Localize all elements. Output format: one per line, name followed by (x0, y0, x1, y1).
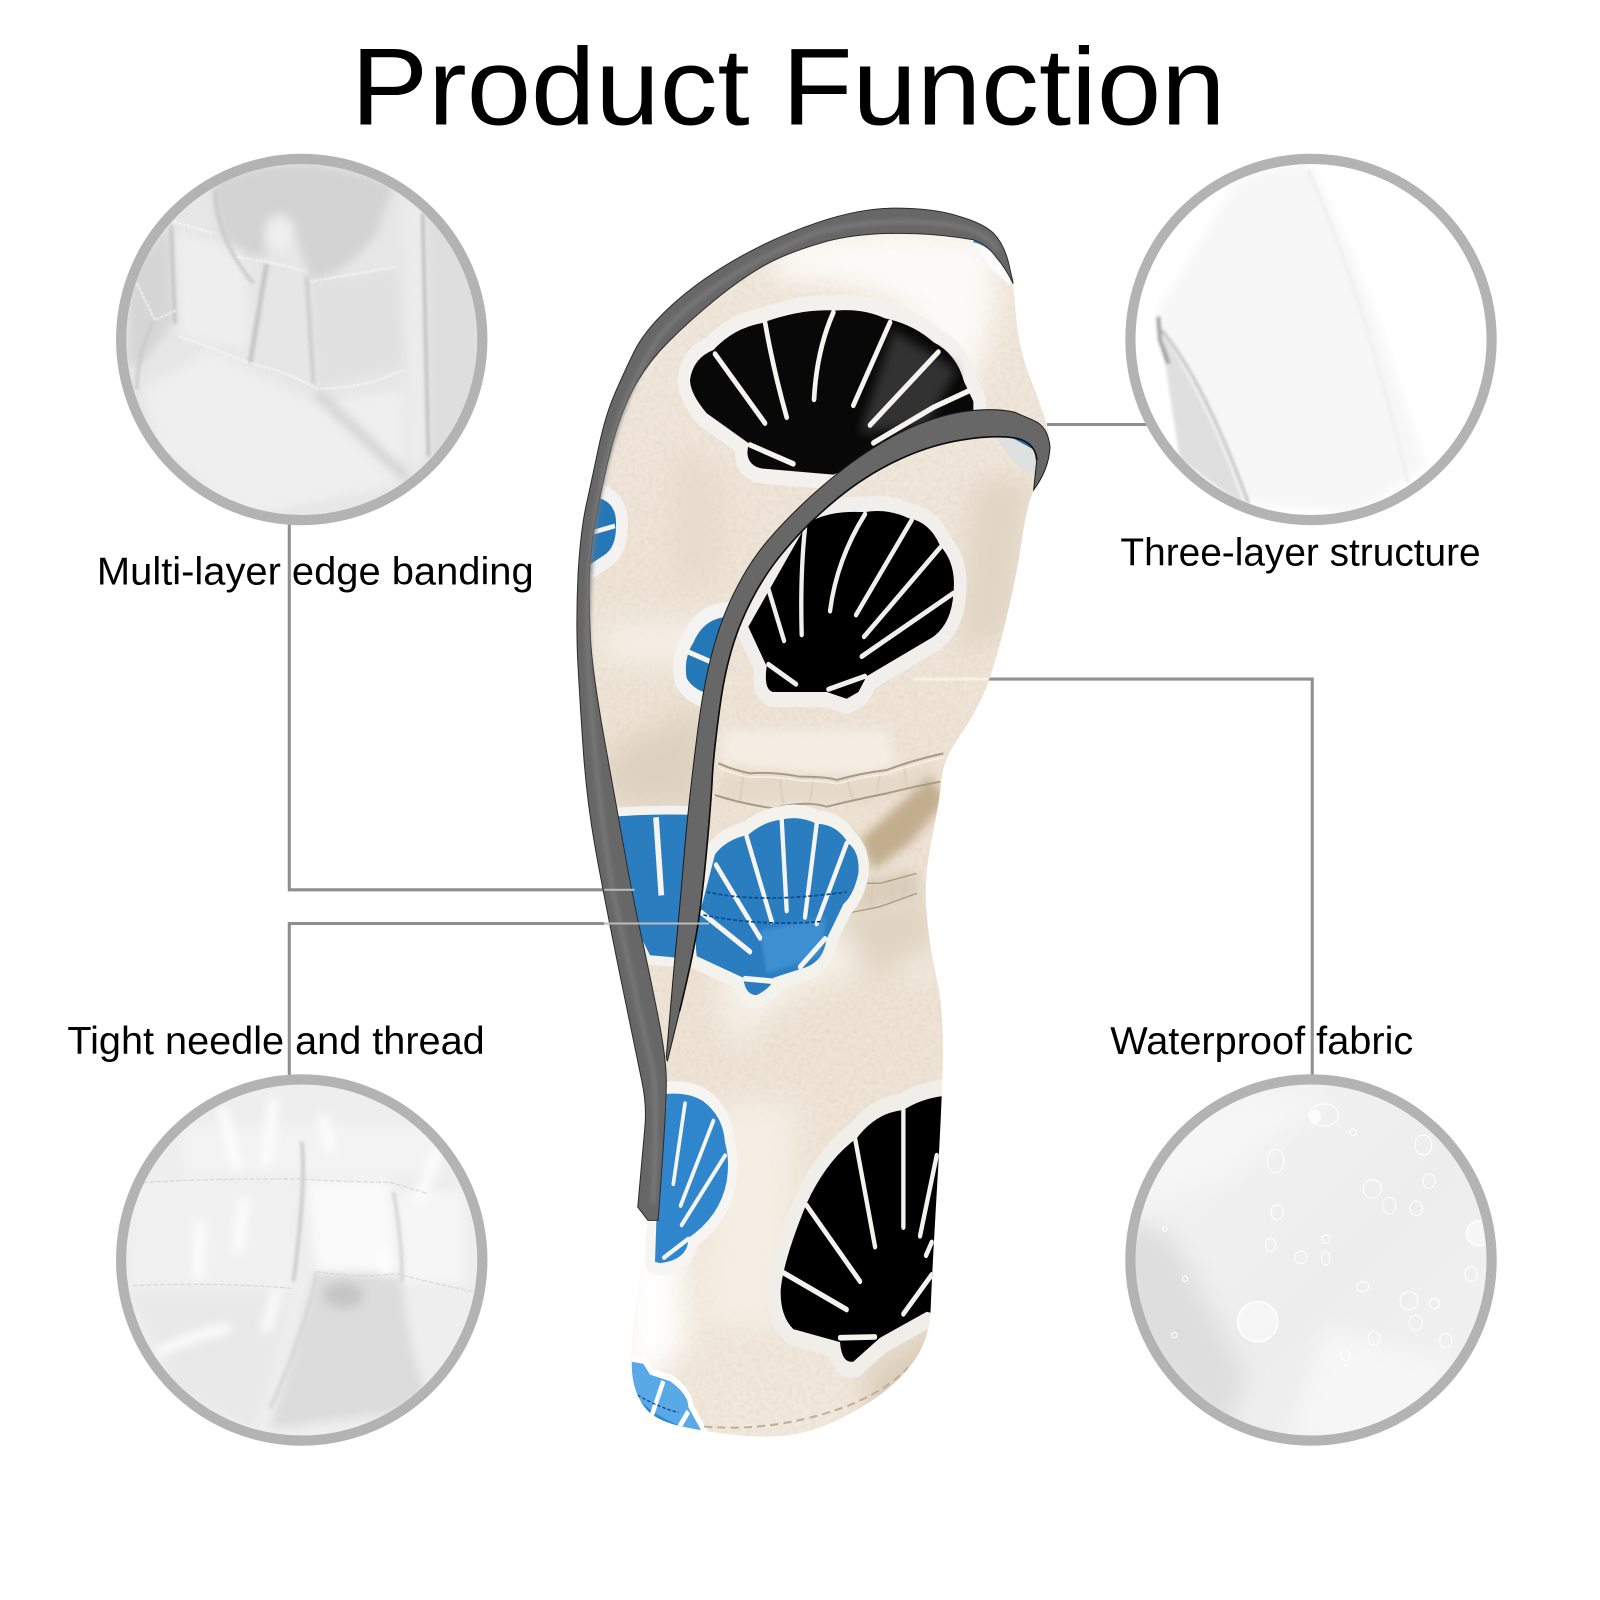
back panel fabric (577, 208, 1050, 1437)
flap grey edge banding (666, 410, 1050, 1061)
shiny highlights (160, 1102, 437, 1352)
connector: waterproof fabric (986, 679, 1312, 1078)
icon: front blue shell (696, 818, 859, 995)
texture: front panel leather (734, 474, 912, 1386)
detail circle: multi-layer edge banding (116, 154, 488, 526)
label: multi-layer edge banding: Multi-layer edge banding (97, 551, 534, 594)
icon: bottom blue shell (628, 1362, 703, 1433)
outer banding highlight (588, 222, 998, 1204)
bottom seam stitches (704, 1367, 908, 1428)
title: Product Function (351, 26, 1226, 148)
label: tight needle and thread: Tight needle and thread (67, 1020, 485, 1063)
icon: blue shell behind flap (685, 617, 733, 694)
outer grey edge banding (577, 208, 1013, 1220)
ruffle and stitching (715, 730, 947, 913)
icon: flap black shell (748, 511, 954, 699)
front panel shading and front shells (632, 438, 1036, 1432)
icon: top black shell (690, 310, 973, 475)
icon: blue sliver at top edge (972, 240, 1010, 286)
icon: big black shell (781, 1095, 960, 1362)
connector overlays on the product (604, 679, 988, 923)
connector: three-layer structure (1047, 423, 1147, 426)
texture: back panel leather (659, 334, 994, 500)
icon: lower blue shell (655, 1094, 728, 1263)
front panel fabric (632, 410, 1050, 1437)
detail circle: waterproof fabric (1125, 1074, 1497, 1446)
detail circle: three-layer structure (1125, 154, 1497, 526)
connector: needle and thread (289, 923, 604, 1078)
icon: blue shell at left edge (588, 498, 616, 566)
icon: blue sliver under flap corner (997, 438, 1036, 474)
product: golf headcover (571, 204, 1061, 1449)
connector: edge banding (289, 522, 604, 890)
back panel shading and back shells (590, 234, 1010, 967)
icon: blue shell under the banding (617, 806, 688, 967)
flap banding inner edge (680, 437, 1037, 1011)
label: three-layer structure: Three-layer structure (1120, 531, 1481, 574)
label: waterproof fabric: Waterproof fabric (1110, 1020, 1413, 1063)
detail circle: tight needle and thread (116, 1074, 488, 1446)
